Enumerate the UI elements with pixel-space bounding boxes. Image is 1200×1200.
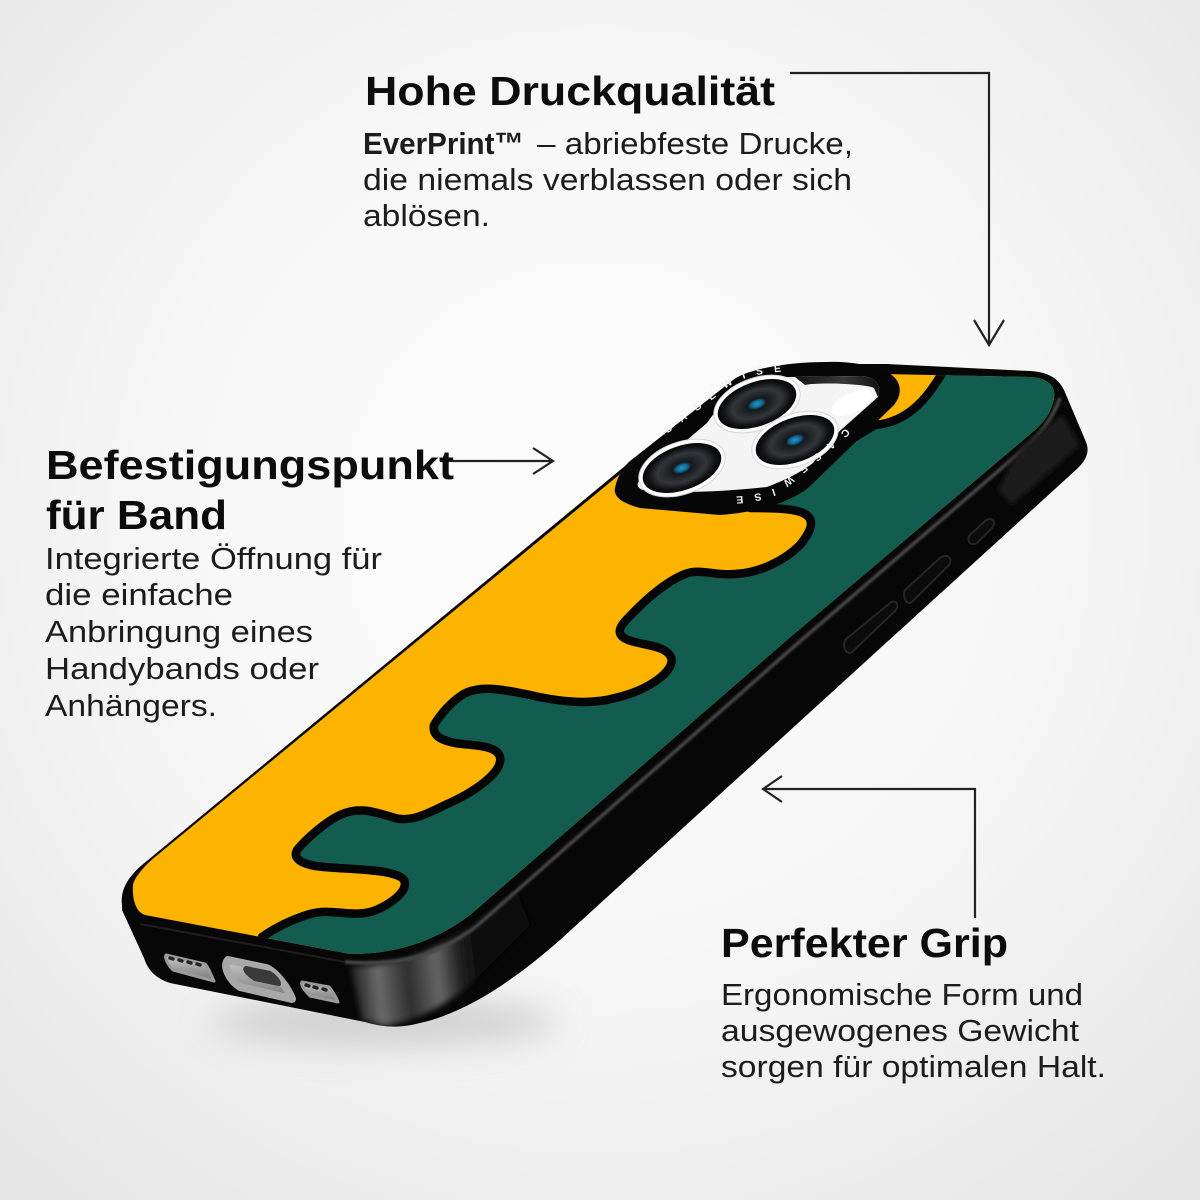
body text	[45, 541, 382, 723]
body text: die niemals verblassen oder sich	[363, 162, 852, 197]
right speaker grille	[302, 982, 338, 1002]
brand ring bottom: CASEWISE	[736, 430, 850, 504]
lens left	[631, 428, 733, 508]
body text: – abriebfeste Drucke,	[537, 126, 853, 161]
body text: ausgewogenes Gewicht	[721, 1013, 1079, 1048]
green wave with black outline	[258, 375, 1054, 954]
heading: Perfekter Grip	[721, 920, 1008, 966]
body text	[363, 126, 853, 233]
body text: die einfache	[45, 577, 233, 612]
left speaker grille	[166, 955, 214, 981]
camera bumper	[615, 362, 900, 515]
heading: Befestigungspunkt	[46, 442, 454, 488]
lens right	[744, 400, 846, 480]
heading	[46, 442, 454, 538]
phone case	[122, 362, 1088, 1027]
heading: Hohe Druckqualität	[365, 68, 775, 114]
lens top	[706, 364, 808, 444]
yellow back panel	[133, 372, 1054, 954]
brand ring top: CASEWISE	[664, 364, 781, 432]
case side details	[140, 398, 1080, 1026]
window inner wall	[795, 376, 879, 397]
callout: print quality	[363, 68, 853, 233]
body text: Integrierte Öffnung für	[45, 541, 382, 576]
camera island	[614, 362, 900, 515]
body text: Ergonomische Form und	[721, 977, 1083, 1012]
heading: für Band	[46, 492, 227, 538]
body text: EverPrint™	[363, 126, 524, 161]
body text: ablösen.	[363, 198, 490, 233]
body text	[721, 977, 1106, 1084]
body text: Anhängers.	[45, 688, 217, 723]
arrow: strap attachment	[440, 448, 553, 474]
phone shadow	[210, 998, 560, 1046]
body text: sorgen für optimalen Halt.	[721, 1049, 1106, 1084]
callout: strap attachment	[45, 442, 454, 723]
camera window	[638, 376, 879, 492]
case body	[122, 364, 1088, 1027]
body text: Anbringung eines	[45, 614, 313, 649]
charging port	[226, 960, 292, 999]
arrow: print quality	[790, 73, 1004, 345]
flash	[828, 385, 876, 421]
callout: grip	[721, 920, 1106, 1084]
arrow: grip	[763, 776, 975, 918]
body text: Handybands oder	[45, 651, 319, 686]
